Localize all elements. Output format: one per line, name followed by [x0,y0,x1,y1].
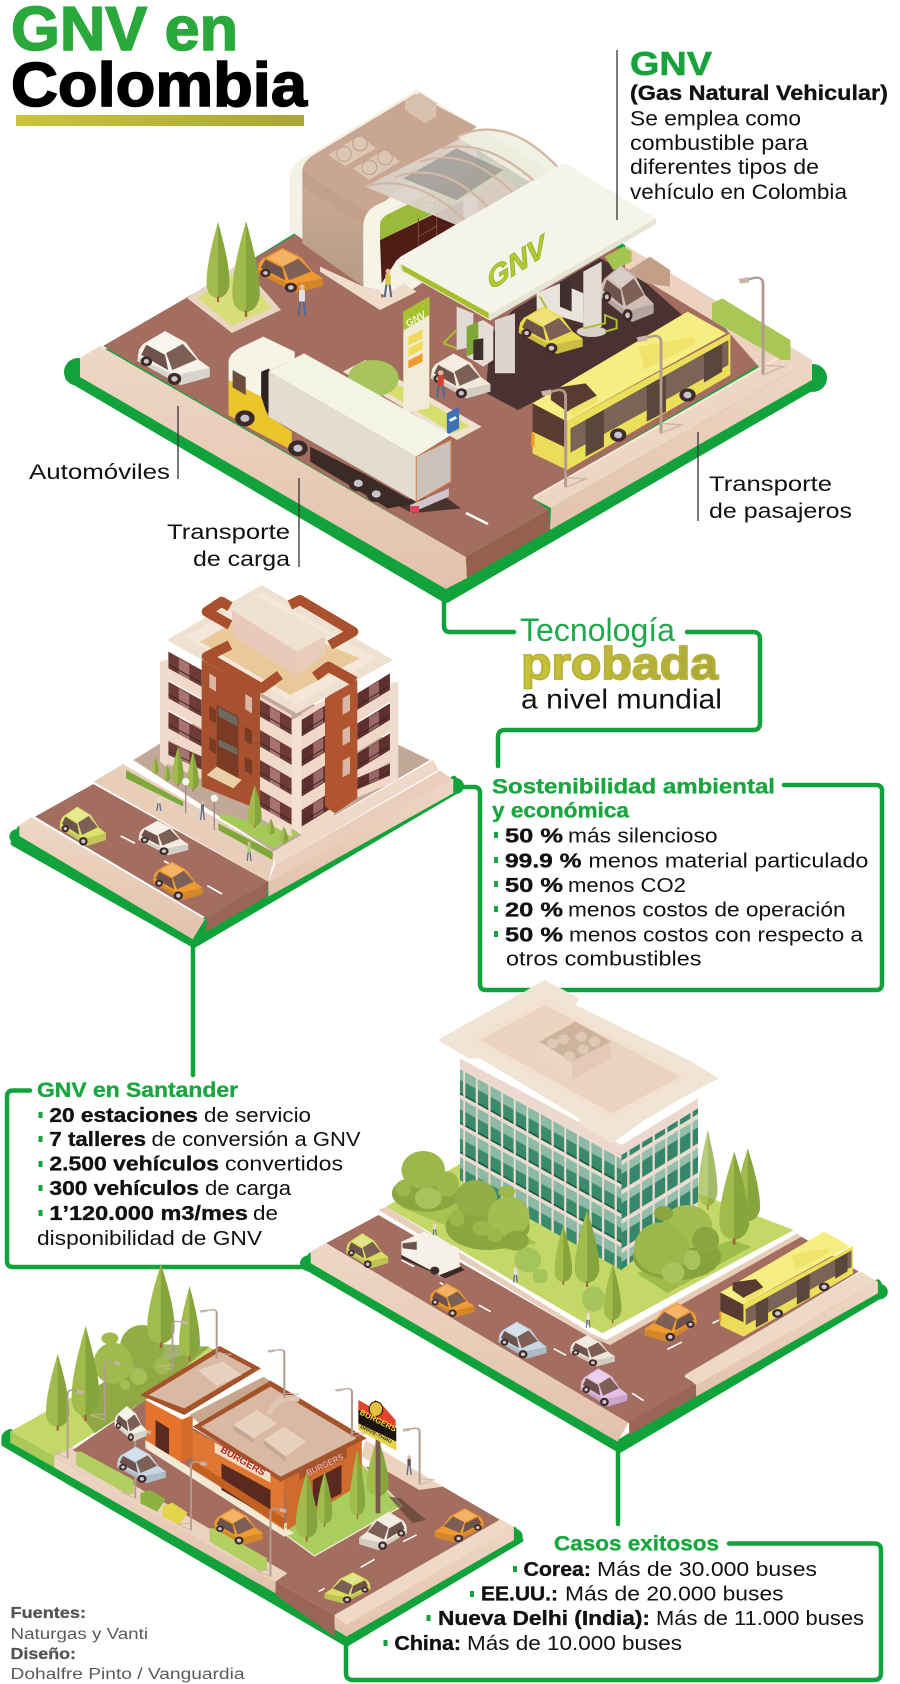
text block: GNV definition: combustible para [630,132,808,155]
people [433,1222,590,1328]
green base [9,778,464,945]
apartment roof [167,585,393,713]
person and van at pump [431,353,490,399]
text panel: GNV en Santander: de carga [205,1177,292,1200]
lawn [386,1163,794,1333]
text panel: Sostenibilidad ambiental y económica: 20 % [505,898,563,921]
road surface [103,150,759,557]
green base [64,140,827,598]
road edge [206,882,268,932]
connector line: office to Casos exitosos [616,1445,620,1524]
lamps [182,778,218,830]
restaurant building [140,1346,367,1537]
platform sidewalk right [532,348,812,530]
text panel: Sostenibilidad ambiental y económica: 50 % [505,874,563,897]
canopy and pumps: GNV [484,228,552,297]
panel frame: Sostenibilidad [463,785,882,990]
panel frame: GNV en Santander [7,1090,310,1267]
connector line: building to Santander [191,945,195,1075]
dumpsters [140,1490,188,1525]
green base [300,1255,888,1451]
truck [229,337,461,513]
road edge [629,1383,696,1435]
text panel: Sostenibilidad ambiental y económica: menos costos con respecto a [569,923,864,946]
illustration: office building scene [300,980,888,1451]
text panel: Sostenibilidad ambiental y económica: otros combustibles [506,948,702,971]
inner sidewalk [378,1207,801,1345]
yellow car at pump [518,307,583,354]
person [407,1455,411,1475]
label: Transporte de pasajeros: Transporte [709,473,832,496]
road [326,1215,859,1423]
label: Transporte de carga [167,478,299,571]
garden trees [152,747,288,844]
text panel: Sostenibilidad ambiental y económica: Sostenibilidad ambiental [492,776,775,799]
shop building [289,89,572,310]
back sidewalk [362,1440,443,1490]
orange car by shop [257,248,323,293]
text panel: GNV en Santander: 2.500 vehículos [49,1153,219,1176]
text panel: Casos exitosos: Nueva Delhi (India): [438,1607,650,1630]
text block: GNV definition: diferentes tipos de [630,156,819,179]
text panel: Casos exitosos: EE.UU.: [481,1583,558,1606]
text block: GNV definition: Se emplea como [630,108,801,130]
text panel: Casos exitosos: Más de 11.000 buses [656,1607,864,1630]
cars [59,807,203,900]
hedges [76,1452,267,1572]
text panel: GNV en Santander: de conversión a GNV [152,1128,361,1151]
sidewalk right [685,1272,878,1397]
canopy and pumps [398,164,670,373]
title [11,0,308,126]
text block: GNV definition: GNV [630,45,712,82]
bushes [392,1151,721,1312]
text panel: GNV en Santander: 1’120.000 m3/mes [49,1202,248,1225]
label: Transporte de carga: Transporte [167,521,290,544]
road edge [276,1582,335,1637]
office roof [438,980,719,1143]
street lamps and hedge [541,277,790,487]
text panel: GNV en Santander [37,1079,361,1250]
text panel: Casos exitosos: China: [394,1632,461,1655]
dark forecourt [486,258,690,410]
planter with bush and arrow sign [343,360,482,440]
label: Automóviles: Automóviles [29,461,170,484]
street lamps [54,1309,434,1577]
restaurant building: BURGERS [219,1444,268,1478]
label: Transporte de pasajeros [698,432,852,523]
platform sidewalk left [80,346,467,589]
text panel: Sostenibilidad ambiental y económica: y económica [492,800,629,822]
white van [401,1232,465,1278]
illustration: burger restaurant scene [1,1264,523,1644]
illustration: gas station scene [64,89,827,598]
trees behind restaurant [46,1264,200,1431]
bus [719,1232,853,1337]
road dashes [318,1535,417,1592]
road dashes [401,1260,719,1401]
burgers sign: DRIVE-THRU [359,1424,393,1444]
text panel: Casos exitosos: Más de 20.000 buses [565,1583,784,1606]
text panel: GNV en Santander: 7 talleres [49,1128,146,1151]
sidewalk left [311,1243,629,1442]
platform sidewalk back right [625,245,812,368]
heading: Tecnología probada a nivel mundial: Tecnología [520,612,675,648]
text panel: Casos exitosos [384,1532,864,1655]
label: Transporte de carga: de carga [193,548,290,571]
text panel: Sostenibilidad ambiental y económica: menos CO2 [568,874,686,897]
heading: Tecnología probada a nivel mundial: a nivel mundial [521,684,722,714]
text panel: GNV en Santander: convertidos [225,1153,343,1176]
person [298,284,306,315]
connector line: station to Tecnología probada to Sostenibilidad [444,600,760,766]
text panel: Sostenibilidad ambiental y económica [492,776,868,971]
leader line: GNV [616,50,618,220]
text panel: GNV en Santander: GNV en Santander [37,1079,238,1102]
storefront sign right [299,1448,347,1480]
title line 2: Colombia [11,51,308,120]
cypress trees [555,1130,760,1323]
front planter lawn [279,1460,402,1556]
road [35,784,268,918]
road dashes [121,836,222,894]
cars [114,1406,484,1603]
sidewalk right [335,1519,514,1637]
road dash [466,513,488,524]
platform rear [93,680,454,897]
text panel: GNV en Santander: de servicio [204,1104,311,1127]
storefront sign left [215,1443,270,1483]
text panel: Casos exitosos: Corea: [524,1558,591,1581]
text panel: Casos exitosos: Casos exitosos [554,1532,719,1556]
text block: GNV definition: vehículo en Colombia [630,181,847,204]
text panel: Sostenibilidad ambiental y económica: 99.9 % [505,850,582,872]
heading: Tecnología probada a nivel mundial [520,612,722,714]
sidewalk left [54,1447,287,1593]
lawn back [10,1343,216,1467]
credits [10,1605,245,1683]
people [157,793,251,861]
label: Transporte de pasajeros: de pasajeros [709,500,852,523]
text block: GNV definition: (Gas Natural Vehicular) [630,82,888,105]
burgers sign [358,1400,398,1513]
text panel: Sostenibilidad ambiental y económica: menos costos de operación [568,898,846,921]
roof fan units [328,93,437,180]
credits: Naturgas y Vanti [10,1626,148,1643]
office glass facades [460,1058,698,1270]
front trees [296,1437,388,1542]
platform sidewalk left [19,817,205,939]
text panel: Casos exitosos: Más de 10.000 buses [467,1632,682,1655]
apartment block [160,652,398,838]
planter with trees [187,221,281,333]
credits: Dohalfre Pinto / Vanguardia [10,1666,245,1683]
text panel: GNV en Santander: 20 estaciones [49,1104,198,1127]
text panel: Sostenibilidad ambiental y económica: 50 % [505,824,563,848]
shop building: SHOP [420,180,459,217]
heading: Tecnología probada a nivel mundial: probada [521,638,719,689]
text panel: GNV en Santander: 300 vehículos [49,1177,199,1200]
green base [1,1430,523,1644]
restaurant building: BURGERS [305,1452,345,1478]
burgers sign: BURGERS [358,1408,398,1434]
credits: Diseño: [10,1646,76,1663]
GNV price sign [403,297,429,413]
title underline [16,115,304,126]
road [73,1400,500,1615]
shadow [389,1497,426,1523]
text panel: Casos exitosos: Más de 30.000 buses [597,1558,817,1581]
bus [531,312,730,470]
roof right block [193,1381,367,1482]
text panel: GNV en Santander: disponibilidad de GNV [37,1227,262,1250]
GNV price sign: GNV [404,309,429,330]
roof left block [140,1346,261,1415]
illustration: apartment building scene [9,585,464,945]
text block: GNV definition [630,45,888,204]
panel frame: Casos exitosos [346,1544,881,1680]
text panel: GNV en Santander: de [253,1202,278,1225]
cars [346,1233,697,1406]
text panel: Sostenibilidad ambiental y económica: 50 % [505,923,563,946]
bushes behind restaurant [94,1325,171,1390]
text panel: Sostenibilidad ambiental y económica: más silencioso [568,824,718,848]
credits: Fuentes: [10,1605,86,1622]
road edge [466,510,550,578]
white car [137,331,210,385]
text panel: Sostenibilidad ambiental y económica: menos material particulado [588,850,868,872]
